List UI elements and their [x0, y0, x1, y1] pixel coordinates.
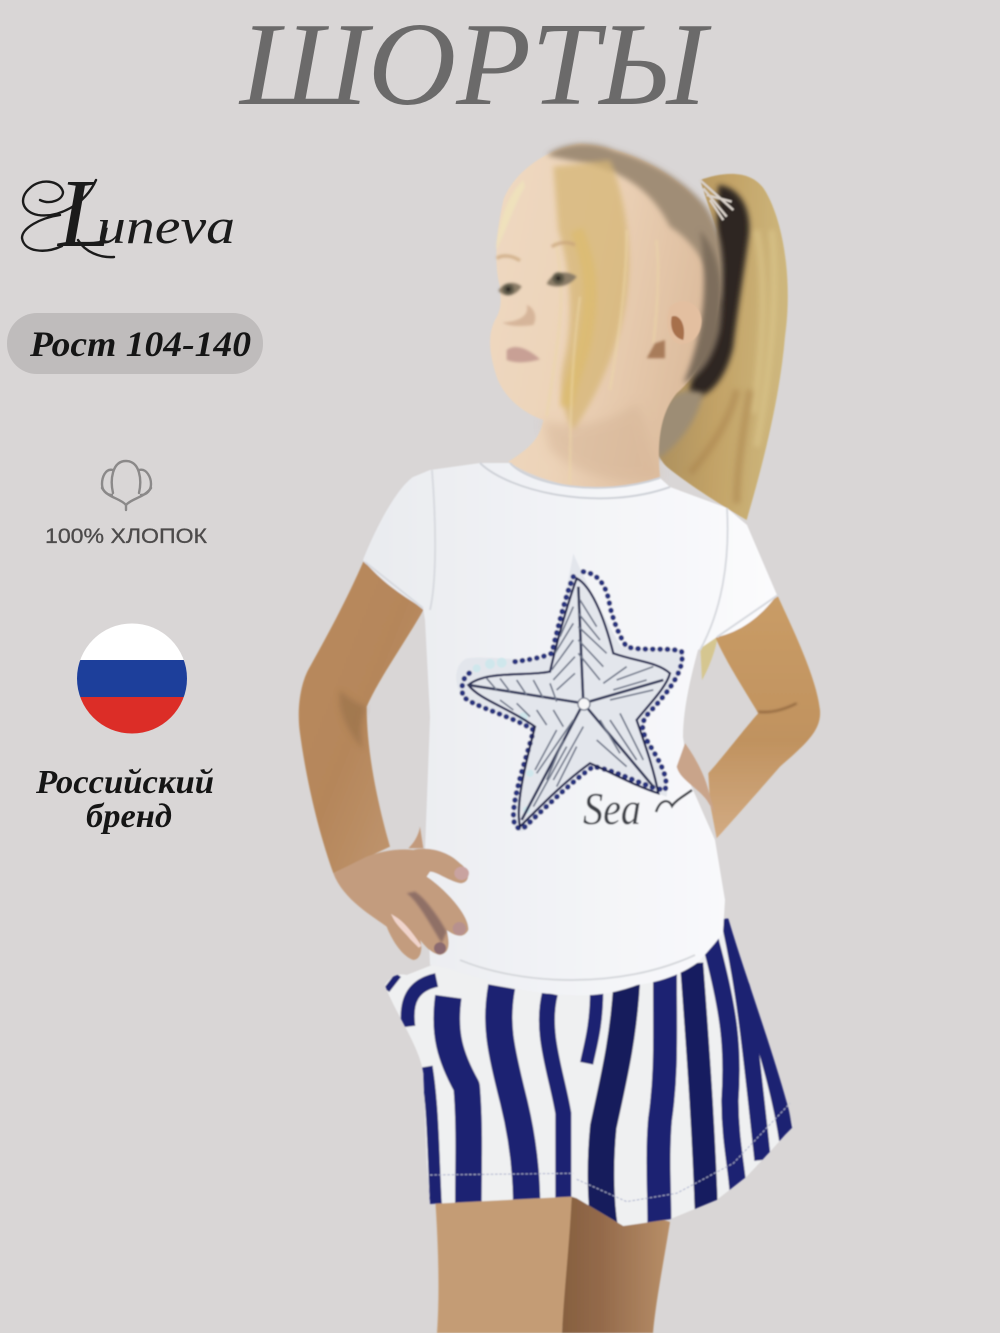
sequins	[473, 658, 534, 814]
dark hairline behind ear	[683, 230, 722, 383]
starfish print	[456, 553, 684, 831]
logo: Luneva: uneva	[97, 198, 235, 254]
t-shirt	[363, 463, 778, 995]
eyebrows	[497, 243, 575, 261]
inner outline	[468, 578, 670, 827]
height badge	[7, 313, 263, 374]
nose	[502, 305, 535, 326]
mouth	[507, 347, 540, 362]
bead outline	[462, 572, 682, 828]
brand label: бренд	[86, 798, 172, 835]
hatching	[487, 600, 653, 807]
striped shorts	[385, 917, 793, 1230]
print text: Sea: Sea	[583, 783, 641, 834]
temple hair	[496, 180, 525, 250]
collar	[480, 463, 670, 498]
front hair lock	[553, 160, 629, 430]
right eye	[547, 272, 577, 287]
height badge: Рост 104-140	[29, 324, 251, 364]
right arm	[708, 595, 820, 838]
hair clip	[700, 180, 733, 220]
print text: Sea	[583, 783, 692, 834]
logo: Luneva: L	[56, 160, 113, 268]
left hand	[333, 827, 469, 960]
hem stitching	[460, 955, 695, 980]
icon: russian flag	[77, 623, 187, 734]
icon: cotton	[102, 461, 151, 510]
title: ШОРТЫ	[238, 0, 712, 130]
hair wisp under sleeve	[700, 635, 718, 680]
neck shadow	[543, 403, 660, 480]
left eye	[498, 283, 522, 295]
sleeve seams	[365, 470, 778, 650]
cotton label: 100% ХЛОПОК	[45, 525, 208, 548]
rays	[468, 587, 663, 820]
ear	[647, 301, 702, 358]
infographic canvas	[7, 25, 821, 1333]
legs	[435, 1190, 670, 1333]
brand label: Российский	[35, 764, 214, 801]
brand label	[35, 764, 214, 835]
logo: Luneva	[22, 160, 235, 268]
head and neck	[490, 143, 733, 490]
ponytail	[654, 174, 788, 520]
left arm	[299, 562, 423, 873]
hair strands	[547, 230, 658, 483]
girl photo illustration	[299, 143, 820, 1333]
right hand	[677, 743, 715, 813]
hair cap	[547, 144, 723, 303]
